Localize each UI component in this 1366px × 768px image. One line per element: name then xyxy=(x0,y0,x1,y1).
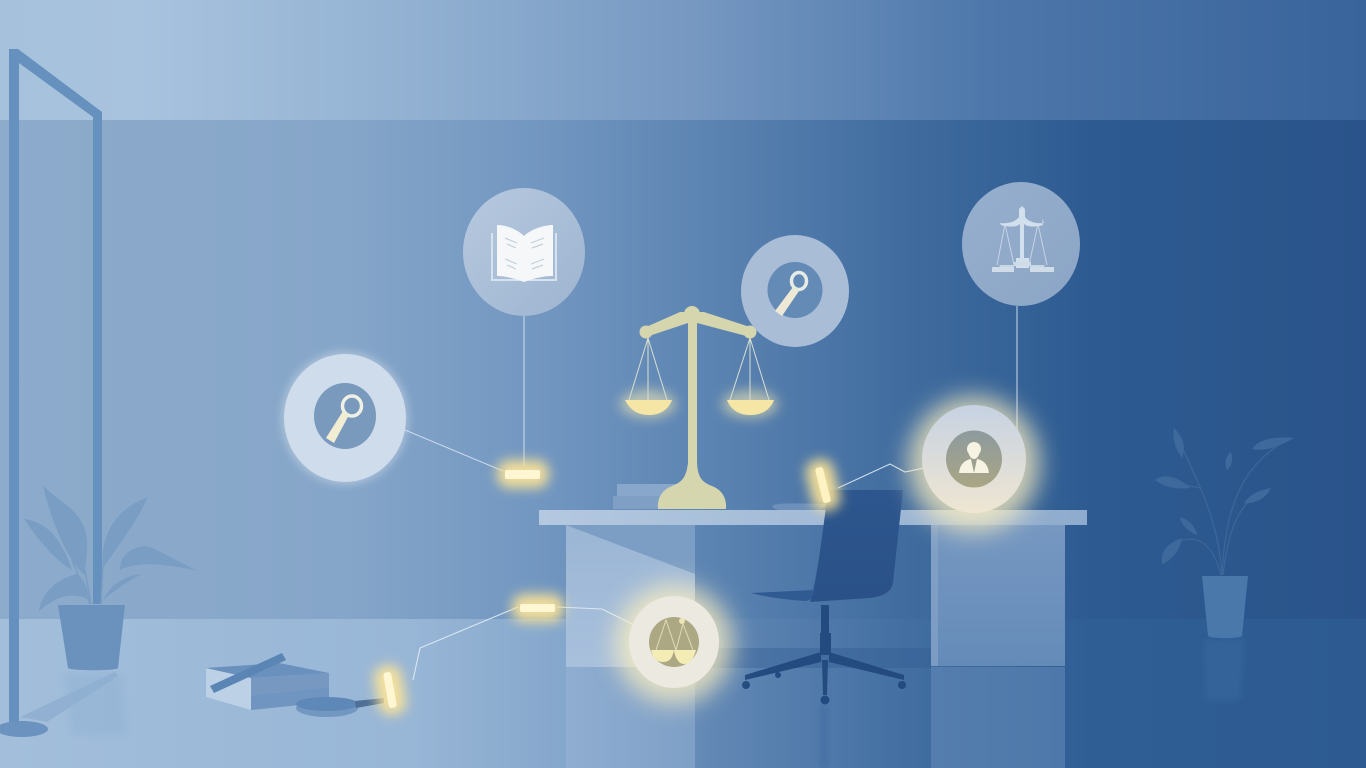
icon: magnifier xyxy=(775,272,806,316)
background: upper wall band xyxy=(0,0,1366,121)
connector lines xyxy=(405,306,1017,680)
background: main wall xyxy=(0,120,1366,620)
left plant pot xyxy=(58,605,125,670)
desk tabletop xyxy=(539,510,1087,525)
left pot reflection xyxy=(64,674,127,735)
bubble: person xyxy=(908,396,1040,532)
icon: person xyxy=(959,442,989,473)
left potted plant xyxy=(24,485,198,611)
office chair xyxy=(742,490,906,704)
background: floor xyxy=(0,619,1366,768)
bubble glow xyxy=(908,396,1040,532)
desk right pedestal xyxy=(931,525,1065,666)
glowing node: floor left xyxy=(372,663,408,717)
right pot reflection xyxy=(1204,640,1244,700)
bubble: small scales, lower xyxy=(615,584,733,704)
chair back xyxy=(810,490,903,602)
bubble glow xyxy=(615,584,733,704)
bubble: scales, top right xyxy=(962,182,1080,306)
icon: scale pans xyxy=(651,618,696,664)
scale pans xyxy=(625,400,672,415)
bubble: magnifier, left xyxy=(281,351,409,485)
scale beam, post and base xyxy=(640,306,756,509)
bubble: open book xyxy=(463,188,585,316)
icon: justice scales xyxy=(992,206,1054,272)
right potted plant xyxy=(1155,428,1294,575)
glowing node: floor centre xyxy=(512,594,564,622)
chair reflection xyxy=(820,705,828,768)
floor book stack with scroll xyxy=(206,653,329,710)
desk left pedestal xyxy=(566,525,695,667)
scale strings xyxy=(629,338,769,400)
glowing node: under book bubble xyxy=(497,460,549,488)
right plant pot xyxy=(1202,576,1248,638)
bubble: magnifier, top centre xyxy=(741,235,849,347)
desk reflection on floor xyxy=(566,667,1065,768)
desk xyxy=(539,510,1087,667)
chair stem and star base xyxy=(742,605,906,704)
small tablet on desk xyxy=(772,503,826,510)
floor magnifying glass xyxy=(296,697,384,717)
books on desk xyxy=(613,484,679,509)
scale glow xyxy=(620,390,676,418)
chair seat xyxy=(751,590,815,601)
central balance scale xyxy=(620,306,778,509)
icon: magnifier xyxy=(326,396,362,443)
glowing node: near chair xyxy=(803,456,843,514)
icon: open book xyxy=(491,225,557,282)
floor lamp frame xyxy=(0,49,118,737)
under-desk shadow xyxy=(695,648,931,668)
